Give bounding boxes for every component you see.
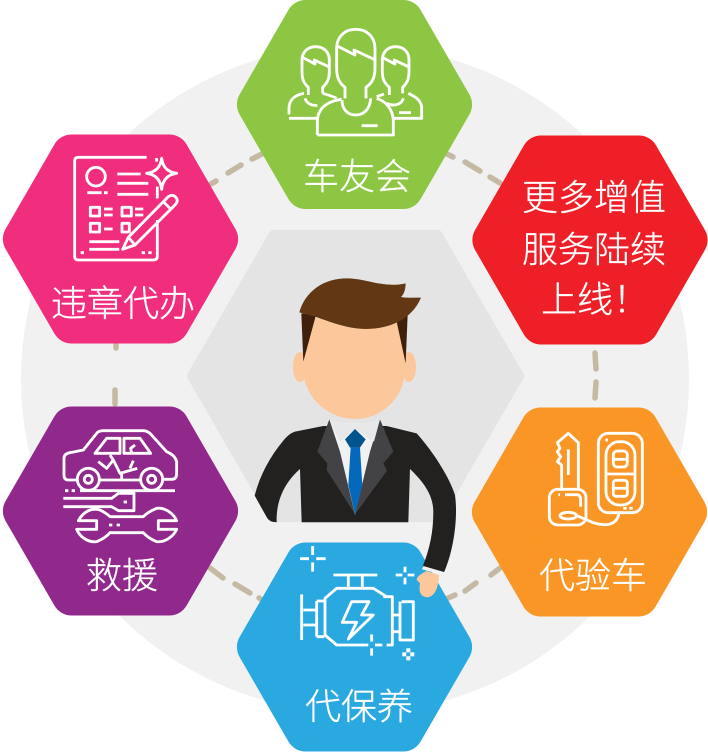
shirt: [329, 419, 380, 515]
label: more services: [522, 177, 666, 320]
label: maintenance: 代保养: [305, 686, 413, 727]
hexagon: roadside rescue: [23, 426, 218, 596]
sideburns: [301, 313, 408, 363]
hexagon: traffic violations: [23, 154, 218, 324]
tie knot: [345, 429, 366, 448]
hexagon: car club: [257, 20, 452, 189]
hexagon: maintenance: [257, 562, 452, 732]
label: car club: 车友会: [303, 156, 411, 197]
hexagon: vehicle inspection: [492, 428, 687, 596]
label: roadside rescue: 救援: [86, 555, 158, 596]
cuff: [422, 566, 444, 575]
tie: [348, 448, 362, 514]
icon: car key and fob: [549, 433, 642, 525]
collar: [329, 419, 380, 442]
suit: [255, 426, 456, 572]
icon: engine: [300, 546, 414, 660]
hand: [417, 571, 439, 597]
hexagon: more services: [492, 156, 688, 324]
central hexagon: [192, 235, 519, 517]
lapels: [317, 419, 393, 514]
face: [303, 318, 405, 419]
dashed connector ring: [115, 154, 596, 600]
ears: [293, 352, 416, 382]
label: traffic violations: 违章代办: [51, 283, 195, 324]
label: more services: 更多增值: [522, 177, 666, 218]
icon: form and pencil: [75, 157, 177, 260]
icon: three people: [289, 29, 422, 135]
label: more services: 服务陆续: [522, 229, 666, 270]
businessman figure: [255, 278, 456, 597]
label: more services: 上线！: [541, 279, 649, 320]
icon: broken car and wrench: [63, 431, 177, 542]
label: vehicle inspection: 代验车: [539, 555, 647, 596]
hair: [299, 278, 421, 329]
